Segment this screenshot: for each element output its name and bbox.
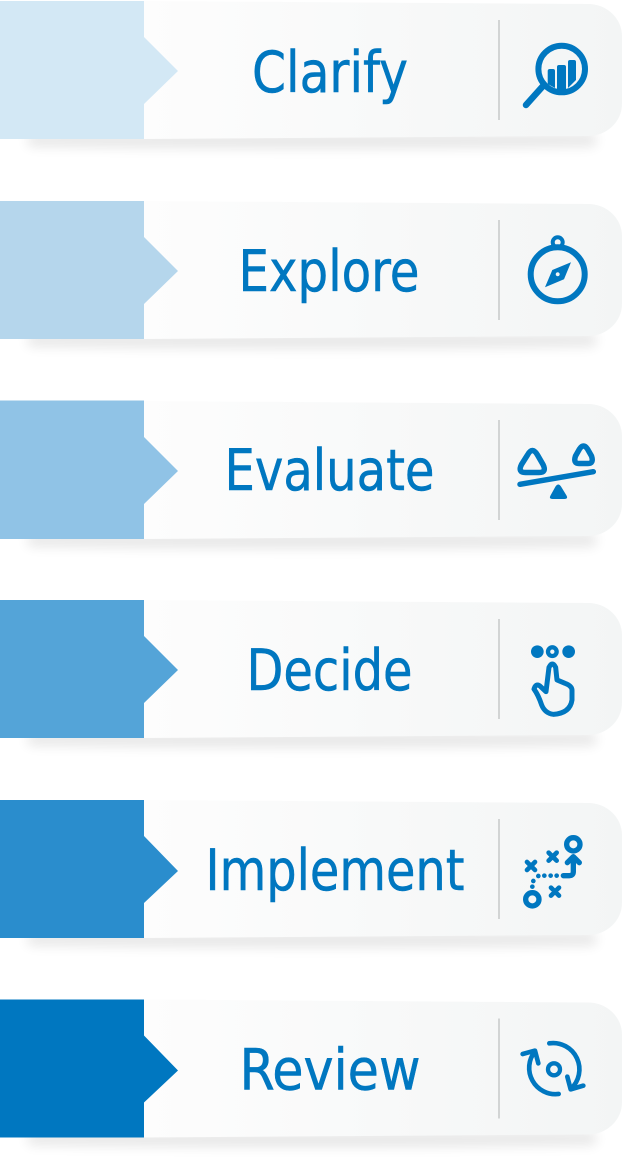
step: Evaluate — [0, 400, 622, 548]
heading: Decide — [246, 638, 412, 704]
icon: compass — [531, 237, 585, 301]
divider — [498, 819, 500, 919]
icon: balance scale — [520, 446, 593, 499]
divider — [498, 220, 500, 320]
icon: review cycle — [523, 1043, 583, 1094]
heading: Evaluate — [224, 438, 434, 504]
shadow — [28, 933, 596, 947]
heading: Clarify — [252, 40, 408, 106]
step: Explore — [0, 201, 622, 348]
panel — [144, 1, 622, 139]
divider — [498, 420, 500, 520]
panel — [144, 201, 622, 339]
panel — [144, 800, 622, 938]
heading: Review — [240, 1038, 420, 1104]
shadow — [28, 134, 596, 148]
colour tab — [0, 1, 178, 139]
icon: hand pointing at dots — [531, 645, 575, 714]
shadow — [28, 534, 596, 548]
colour tab — [0, 800, 178, 938]
heading: Explore — [238, 239, 420, 305]
step: Implement — [0, 800, 622, 947]
divider — [498, 619, 500, 719]
shadow — [28, 733, 596, 747]
divider — [498, 1018, 500, 1118]
shadow — [28, 334, 596, 348]
colour tab — [0, 201, 178, 339]
colour tab — [0, 400, 178, 539]
icon: magnifier with bars — [526, 46, 585, 105]
step: Decide — [0, 600, 622, 747]
colour tab — [0, 600, 178, 738]
panel — [144, 401, 622, 539]
step: Review — [0, 1000, 622, 1146]
divider — [498, 20, 500, 120]
shadow — [28, 1132, 596, 1146]
step: Clarify — [0, 1, 622, 148]
panel — [144, 600, 622, 738]
panel — [144, 1000, 622, 1138]
heading: Implement — [206, 838, 464, 904]
icon: game plan — [526, 838, 580, 906]
colour tab — [0, 1000, 178, 1138]
